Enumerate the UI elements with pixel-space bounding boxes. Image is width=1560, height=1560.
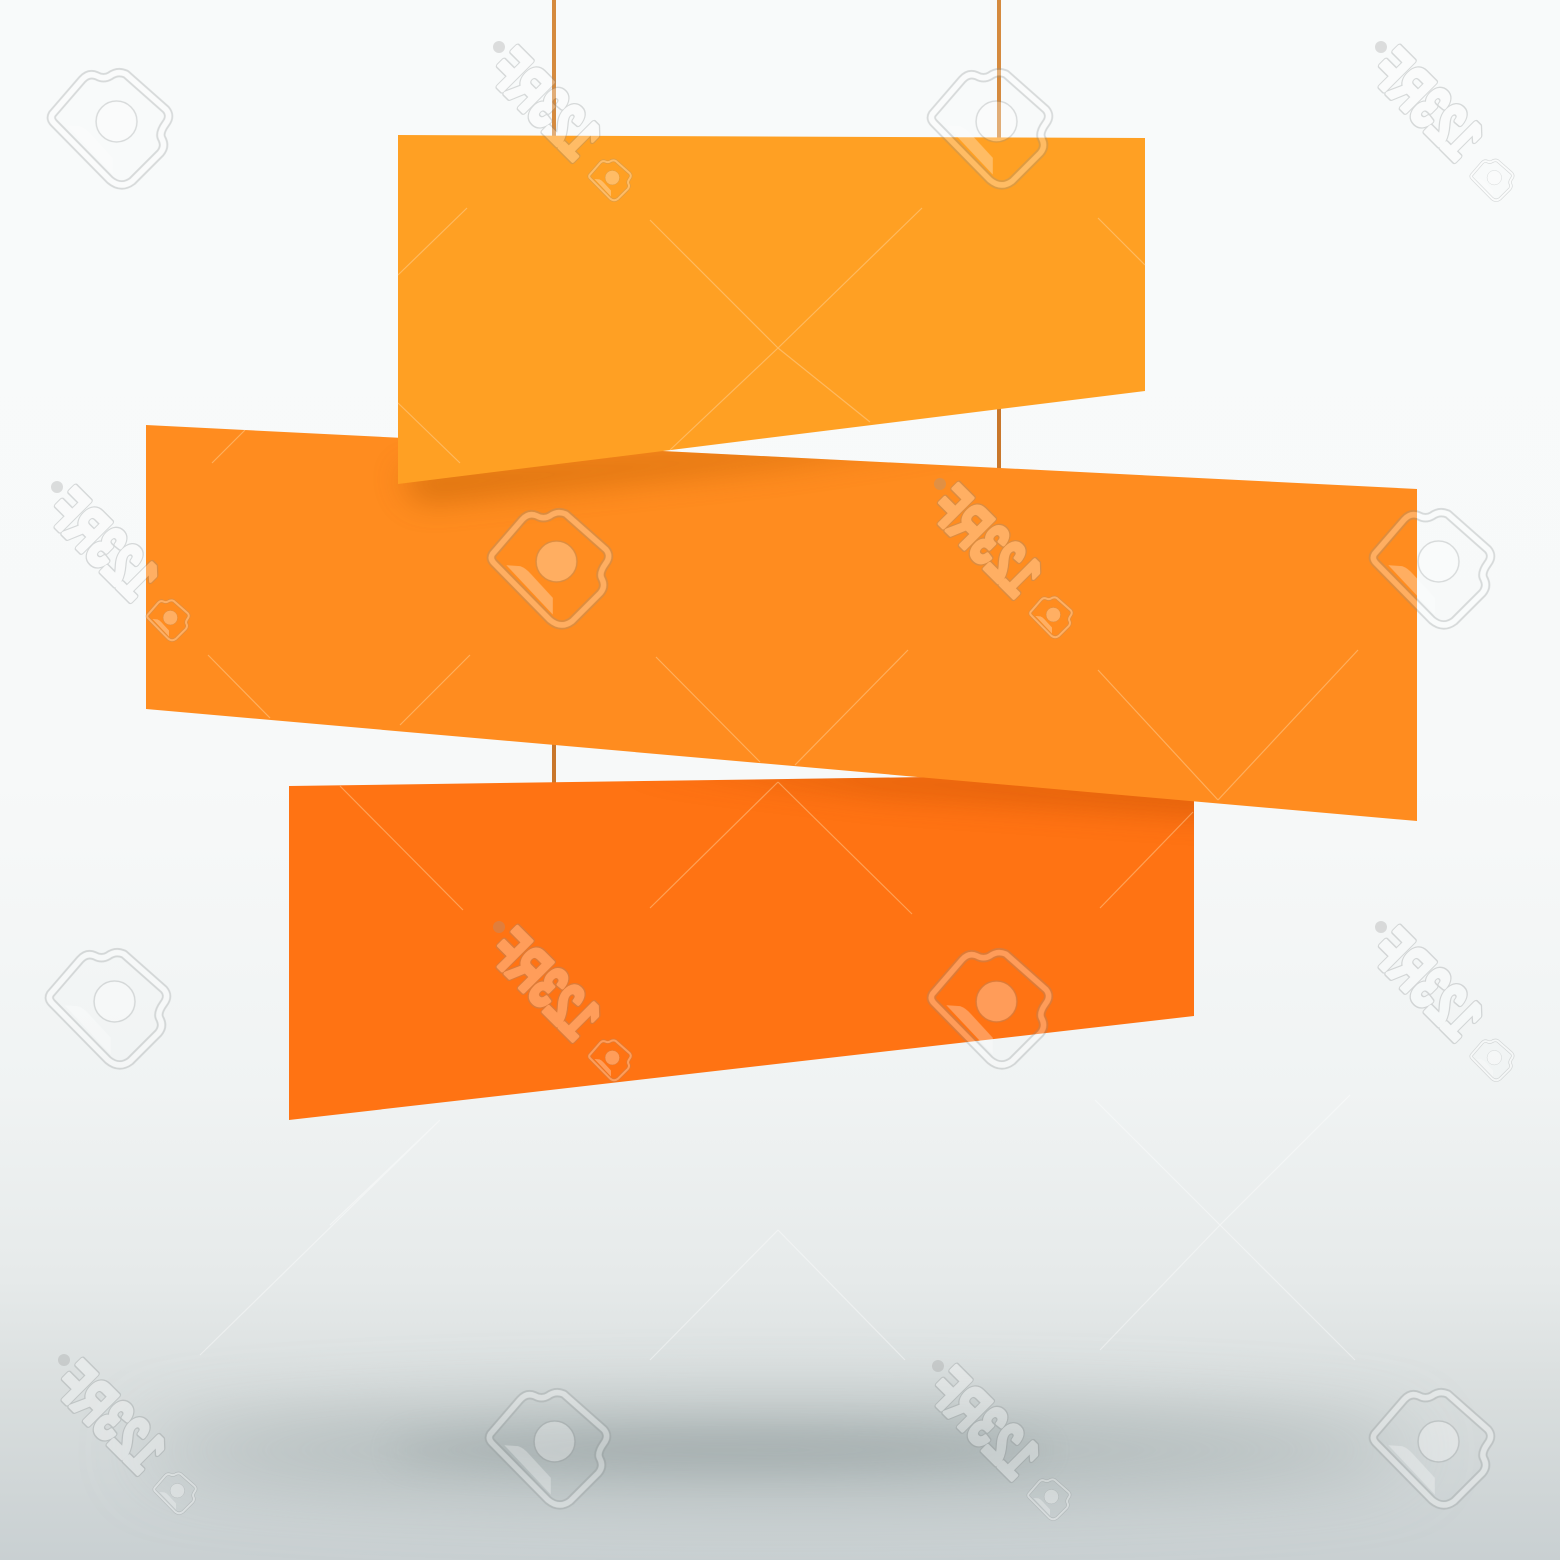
panel: middle banner [146,425,1417,821]
watermark text 1: 123RF [477,36,613,172]
background facet lines [200,1095,1355,1360]
watermark text 7: 123RF [42,1349,178,1485]
watermark text 3: 123RF [35,476,171,612]
watermark text 5 [477,916,631,1080]
watermark text 6 [1359,916,1513,1080]
watermark text 2 [1359,36,1513,200]
watermark text 6: 123RF [1359,916,1495,1052]
watermark text 8 [916,1355,1070,1519]
panel: top banner [398,135,1145,484]
watermark text 3 [35,476,189,640]
hanging string: right upper [997,0,1001,142]
shadow cast on bottom banner [755,777,1194,823]
watermark text 8: 123RF [916,1355,1052,1491]
watermark text 2: 123RF [1359,36,1495,172]
panel facet lines [208,208,1358,914]
watermark text 7 [42,1349,196,1513]
hanging string: left upper [552,0,556,140]
watermark text 1 [477,36,631,200]
watermark text 1: 123RF [477,36,613,172]
shadow cast on middle banner [402,451,848,512]
watermark text 5: 123RF [477,916,613,1052]
watermark text 4: 123RF [918,473,1054,609]
watermark text 4 [918,473,1072,637]
hanging string: right middle [997,405,1001,471]
panel: bottom banner [289,760,1220,1120]
watermark text 5: 123RF [477,916,613,1052]
watermark text 6: 123RF [1359,916,1495,1052]
watermark text 3: 123RF [35,476,171,612]
watermark text 8: 123RF [916,1355,1052,1491]
watermark text 2: 123RF [1359,36,1495,172]
hanging string: left lower [552,740,556,790]
watermark text 7: 123RF [42,1349,178,1485]
watermark text 4: 123RF [918,473,1054,609]
floor shadow [140,1412,1420,1488]
